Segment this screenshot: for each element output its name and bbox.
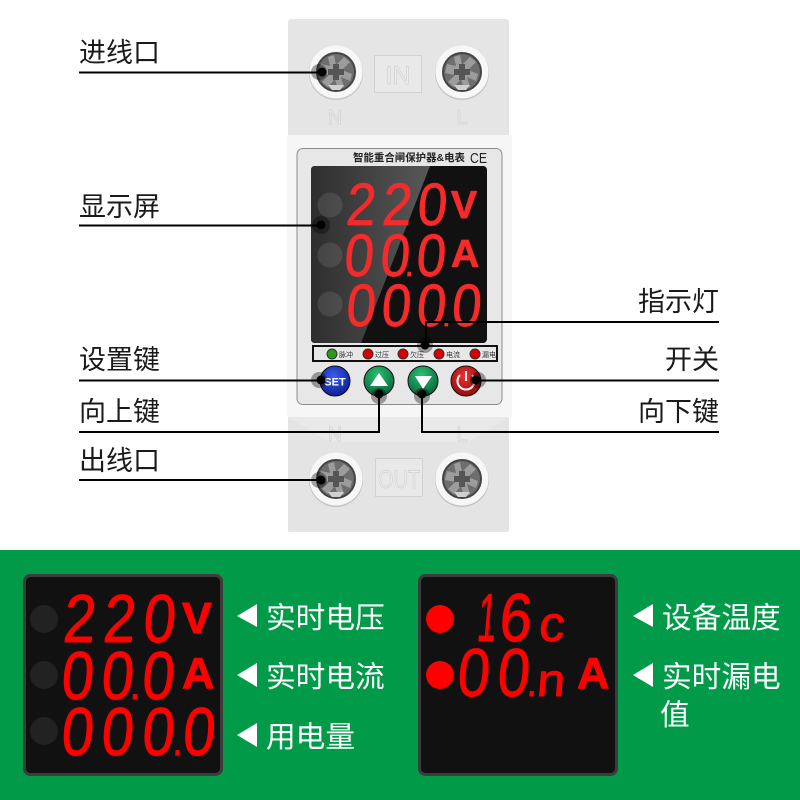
reading: 00.0 A <box>342 223 479 290</box>
indicator: over voltage: 过压 <box>375 350 389 359</box>
panel reading: 000.0: . <box>171 718 185 765</box>
callout: power switch: 开关 <box>665 345 719 375</box>
indicator: leakage: 漏电 <box>482 350 496 359</box>
indicator: under voltage <box>398 349 424 359</box>
callout: indicators <box>417 287 719 353</box>
product title: 智能重合闸保护器&电表 <box>353 151 465 164</box>
callout: input port <box>79 38 327 80</box>
caption: device temperature: 设备温度 <box>662 602 781 635</box>
indicator: over voltage <box>363 349 389 359</box>
callout: input port: 进线口 <box>79 38 160 68</box>
panel reading: 220 V: 220 <box>61 582 179 657</box>
panel: temperature and leakage display <box>420 576 616 774</box>
panel reading: 00.0 A <box>59 639 214 714</box>
callout: indicators: 指示灯 <box>638 287 719 317</box>
reading: 000.0: . <box>441 294 453 334</box>
panel reading: 00.0 A: 0 <box>139 639 178 714</box>
label box: OUT: OUT <box>378 466 420 494</box>
indicator: pulse <box>327 349 353 359</box>
caption: realtime leakage value: 值 <box>660 699 690 732</box>
callout: output port <box>79 446 327 488</box>
caption: realtime leakage value <box>633 661 781 732</box>
callout: display: 显示屏 <box>79 192 160 222</box>
button: power <box>451 366 481 396</box>
panel reading: 16 c <box>475 580 567 656</box>
panel reading: 16 c: 1 <box>475 580 500 656</box>
callout: display <box>79 192 330 234</box>
upper terminal housing <box>288 19 509 139</box>
panel reading: 00.0 A: 00 <box>59 639 137 714</box>
terminal label N top: N <box>328 107 342 129</box>
button: up <box>364 366 394 396</box>
screw: output N <box>309 452 363 507</box>
panel reading: 000.0: 0 <box>180 695 219 770</box>
label box: IN <box>374 56 422 92</box>
reading: 000.0: 000 <box>344 273 449 340</box>
reading: 220 V: 220 <box>344 172 450 239</box>
display screen <box>311 166 487 343</box>
reading: 00.0 A: A <box>451 233 479 276</box>
button: SET: SET <box>324 376 346 388</box>
reading: 00.0 A: . <box>404 244 416 284</box>
callout: down key: 向下键 <box>638 397 719 427</box>
indicator: under voltage: 欠压 <box>410 350 424 359</box>
indicator: leakage <box>470 349 496 359</box>
panel: readings display <box>24 576 222 774</box>
screw: input N <box>309 46 363 100</box>
callout: output port: 出线口 <box>79 446 160 476</box>
panel reading: 00.n A: A <box>577 649 609 698</box>
panel reading: 220 V: V <box>182 594 212 643</box>
callout: down key <box>414 388 719 432</box>
caption: realtime leakage value: 实时漏电 <box>662 661 781 694</box>
faceplate <box>297 148 502 404</box>
caption: energy used: 用电量 <box>266 721 355 754</box>
panel reading: 00.n A: . <box>526 659 540 706</box>
callout: settings key <box>79 345 327 388</box>
panel reading: 00.n A: n <box>535 655 568 706</box>
terminal label L top: L <box>456 107 468 129</box>
label box: OUT <box>376 458 422 496</box>
button: down <box>408 366 438 396</box>
indicator: pulse: 脉冲 <box>339 350 353 359</box>
main body <box>287 135 512 417</box>
label box: IN: IN <box>386 62 410 90</box>
callout: up key: 向上键 <box>79 397 160 427</box>
indicator strip <box>313 346 497 361</box>
terminal label L bottom: L <box>456 424 468 446</box>
callout: power switch <box>470 345 719 388</box>
lower terminal housing <box>288 410 509 532</box>
panel reading: 00.n A <box>455 636 609 711</box>
panel reading: 00.0 A: A <box>182 649 214 698</box>
terminal label N bottom: N <box>328 424 342 446</box>
indicator: current: 电流 <box>446 350 460 359</box>
screw: output L <box>435 452 489 507</box>
caption: realtime voltage: 实时电压 <box>266 602 385 635</box>
button: SET <box>320 366 350 396</box>
panel reading: 000.0: 000 <box>59 695 178 770</box>
callout: up key <box>79 388 387 432</box>
panel reading: 00.n A: 00 <box>455 636 533 711</box>
CE mark: CE <box>470 150 487 167</box>
callout: settings key: 设置键 <box>79 345 160 375</box>
reading: 00.0 A: 0 <box>414 223 449 290</box>
reading: 220 V: V <box>451 184 477 227</box>
screw: input L <box>435 46 489 100</box>
reading: 000.0: 0 <box>449 273 485 340</box>
caption: realtime current: 实时电流 <box>266 661 385 694</box>
device: din rail protector <box>287 19 512 532</box>
panel reading: 16 c: 6 <box>497 581 535 656</box>
panel reading: 00.0 A: . <box>129 662 143 709</box>
reading: 00.0 A: 00 <box>342 223 413 290</box>
panel reading: 16 c: c <box>537 596 567 652</box>
indicator: current <box>434 349 460 359</box>
green band <box>0 550 800 800</box>
